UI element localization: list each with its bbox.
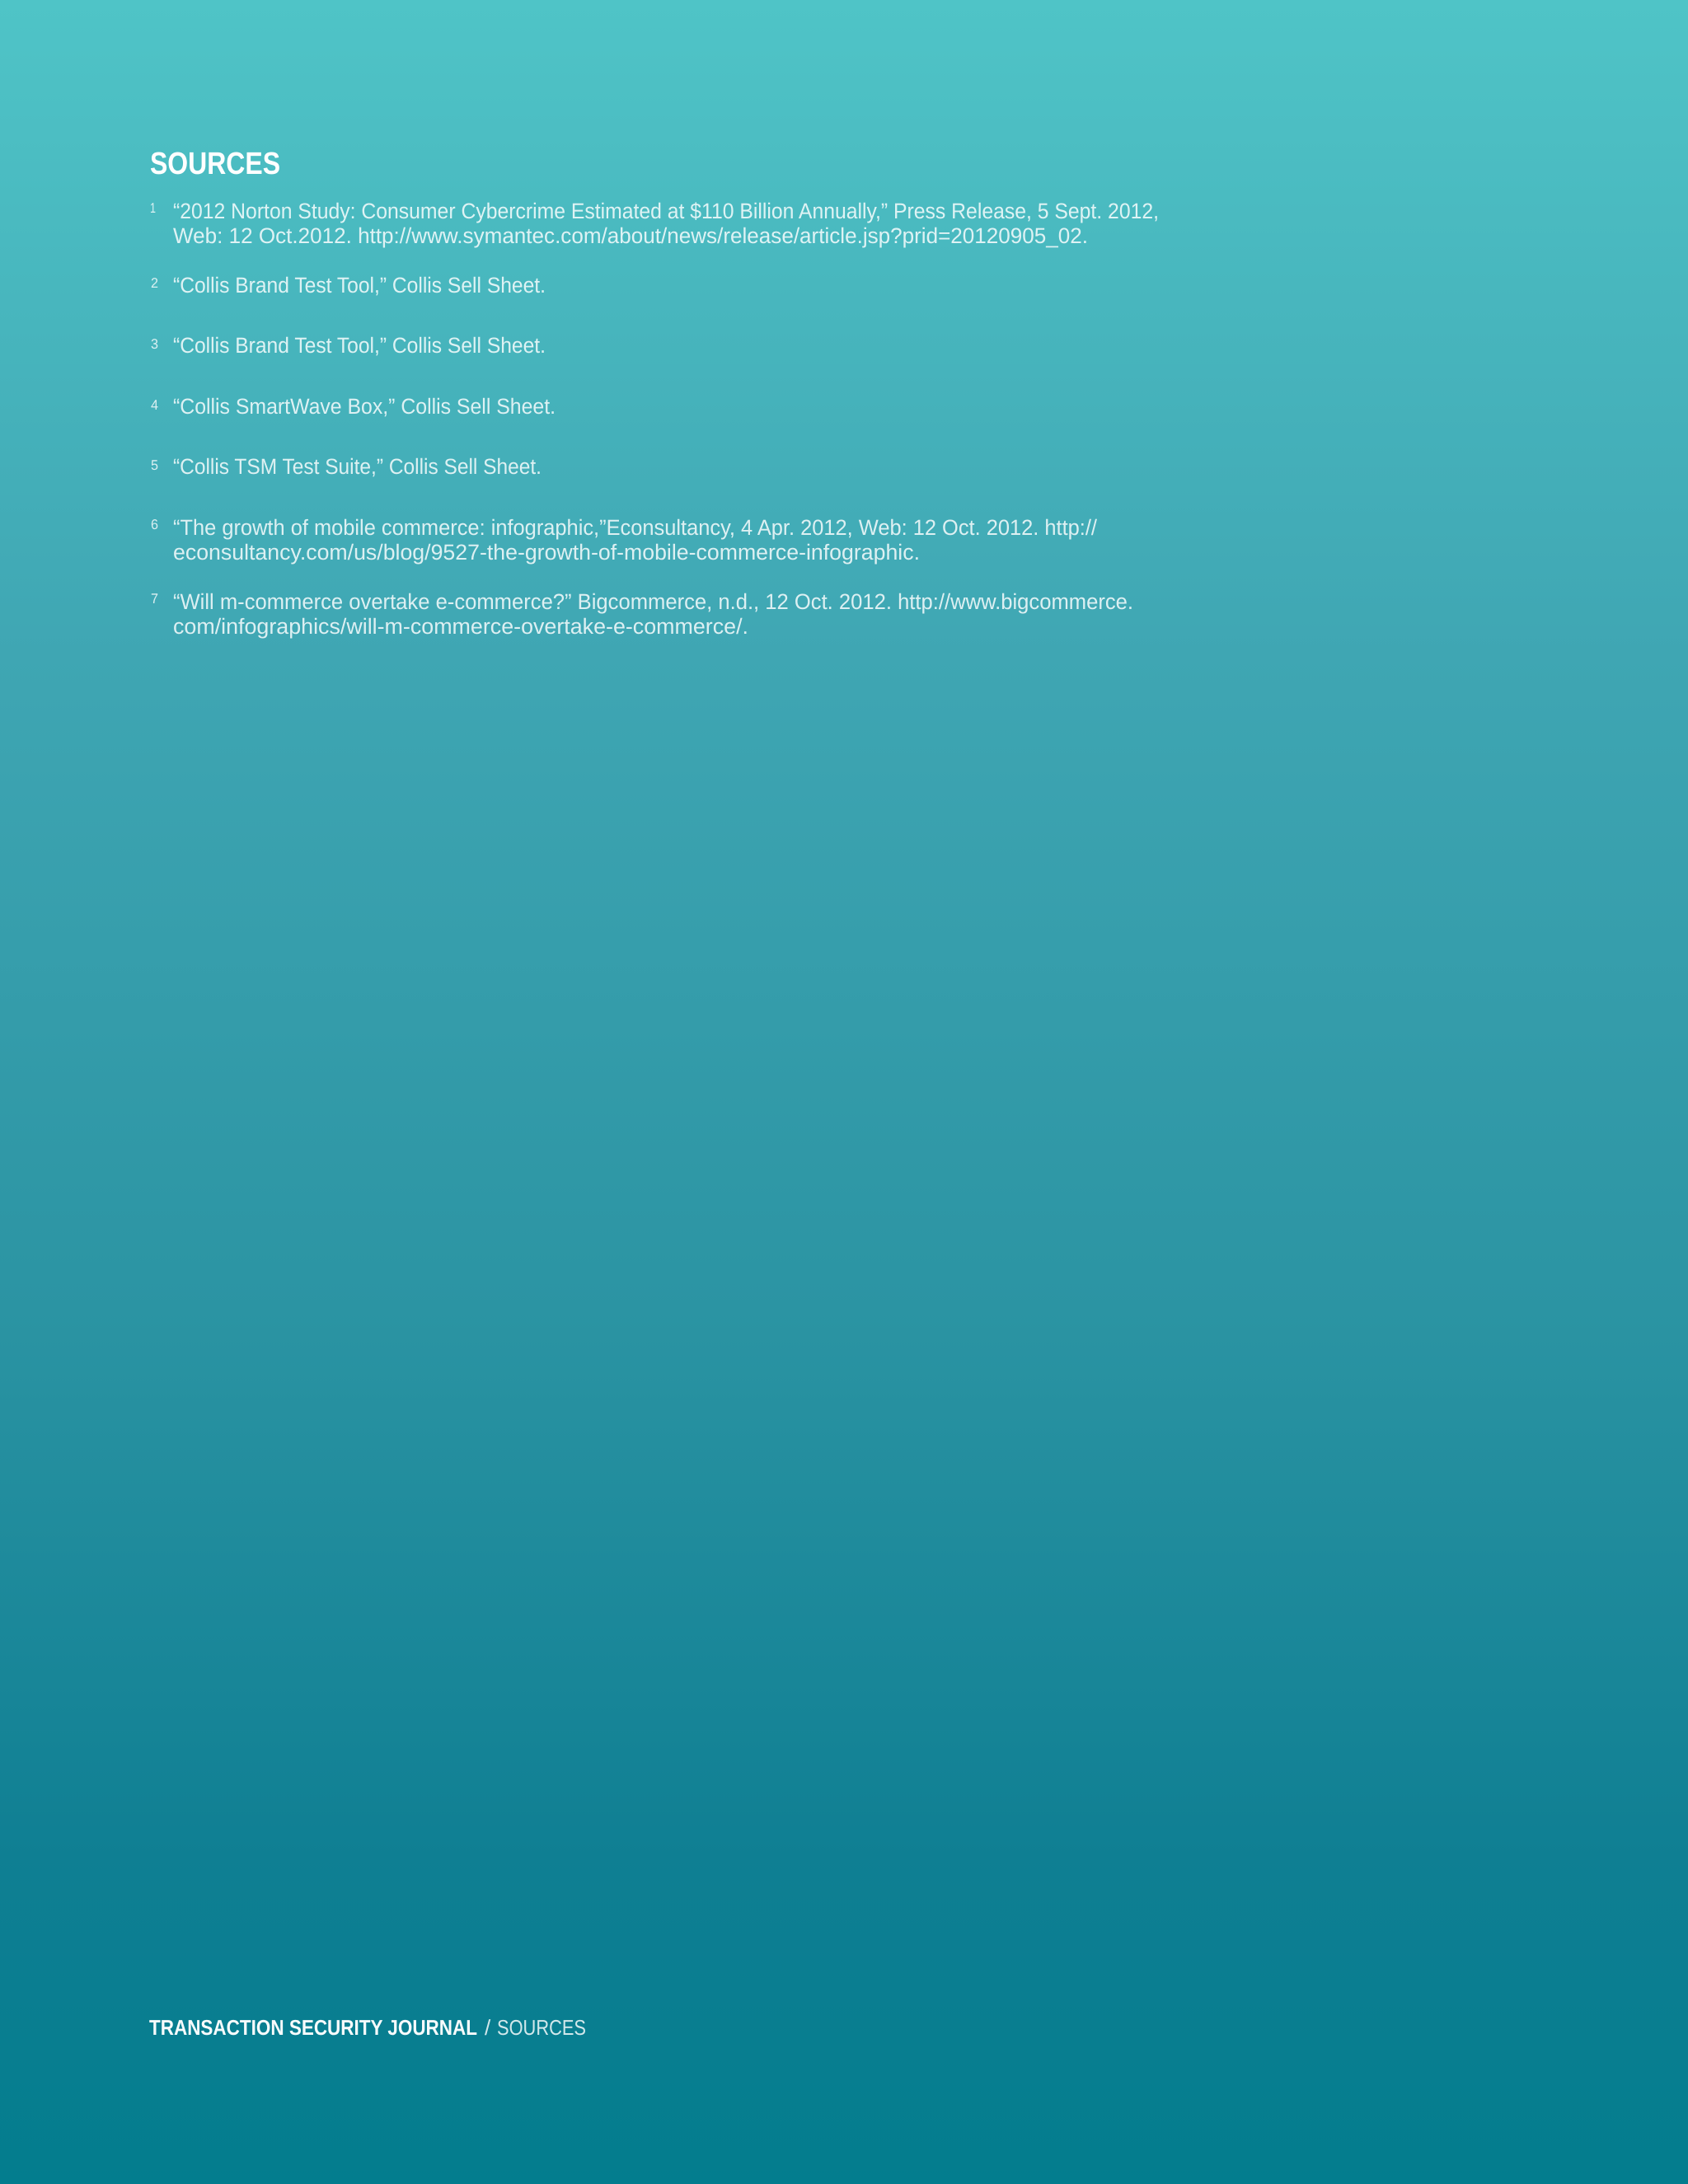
footer line: TRANSACTION SECURITY JOURNAL xyxy=(149,2015,477,2040)
source 1 xyxy=(150,199,1159,248)
source 1: Web: 12 Oct.2012. http://www.symantec.com/about/news/release/article.jsp?prid=20120905_02. xyxy=(173,223,1088,248)
source 3: 3 xyxy=(151,336,158,352)
source 3: “Collis Brand Test Tool,” Collis Sell Sheet. xyxy=(173,333,546,358)
source 6: econsultancy.com/us/blog/9527-the-growth-of-mobile-commerce-infographic. xyxy=(173,540,920,565)
source 2: “Collis Brand Test Tool,” Collis Sell Sheet. xyxy=(173,273,546,298)
heading: sources: SOURCES xyxy=(150,147,280,181)
source 1: 1 xyxy=(150,200,156,216)
source 7: “Will m-commerce overtake e-commerce?” Bigcommerce, n.d., 12 Oct. 2012. http://www.bigcommerce. xyxy=(173,589,1133,614)
source 5: 5 xyxy=(151,457,158,473)
footer line: / xyxy=(485,2015,491,2040)
source 6: 6 xyxy=(151,517,158,532)
source 7 xyxy=(151,589,1133,639)
source 5: “Collis TSM Test Suite,” Collis Sell Sheet. xyxy=(173,454,542,479)
footer line: SOURCES xyxy=(497,2015,586,2040)
source 7: 7 xyxy=(151,591,158,607)
source 1: “2012 Norton Study: Consumer Cybercrime Estimated at $110 Billion Annually,” Press Release, 5 Sept. 2012, xyxy=(173,199,1159,223)
source list xyxy=(150,199,1159,639)
source 6 xyxy=(151,515,1098,565)
source 4: 4 xyxy=(151,397,158,413)
source 2: 2 xyxy=(151,275,158,291)
source 7: com/infographics/will-m-commerce-overtake-e-commerce/. xyxy=(173,614,748,639)
source 6: “The growth of mobile commerce: infographic,”Econsultancy, 4 Apr. 2012, Web: 12 Oct. 2012. http:// xyxy=(173,515,1098,540)
source 4: “Collis SmartWave Box,” Collis Sell Sheet. xyxy=(173,394,556,419)
